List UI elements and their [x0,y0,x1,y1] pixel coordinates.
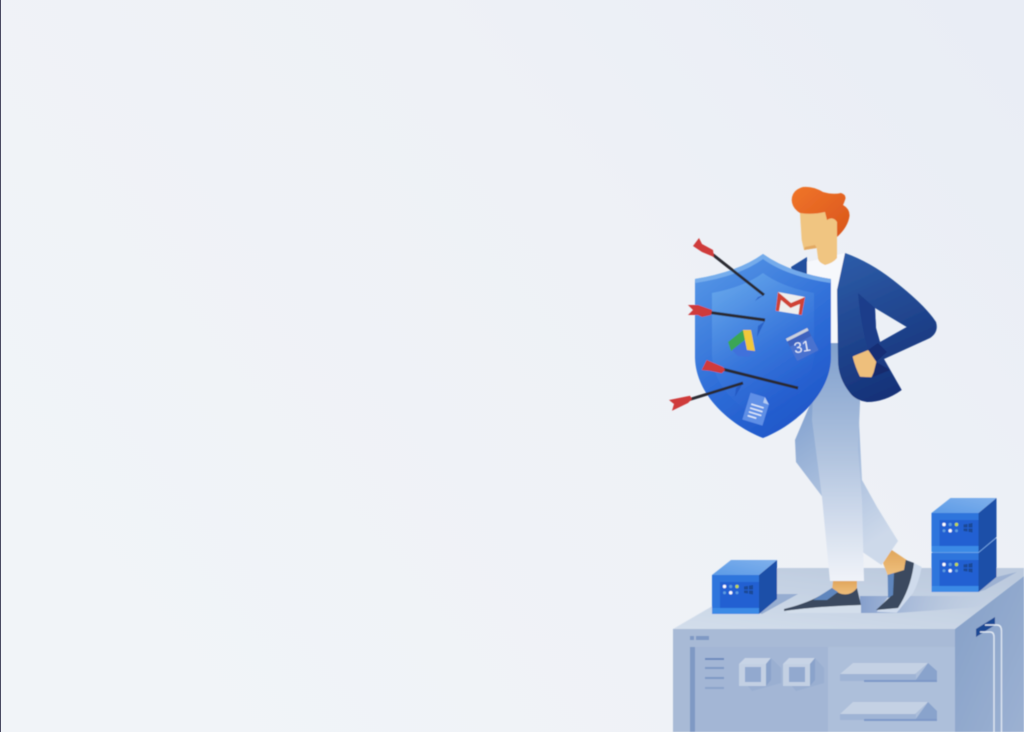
icon: gmail [776,292,805,315]
person [784,187,937,613]
icon: document [742,393,771,426]
front shoe [784,588,861,613]
arrow impact shadows [735,295,765,397]
server box: single, left [712,560,777,614]
white shirt [800,253,845,343]
platform front face [673,629,955,732]
platform menu lines [705,658,724,689]
back leg [795,400,898,565]
back ankle [883,550,907,576]
platform shadows [759,572,1017,614]
icon: drive [728,330,755,357]
platform indicator lights [690,636,709,640]
server box: stack lower [932,538,996,592]
server box: stack upper [932,498,996,552]
front ankle [832,581,857,596]
platform: server block [673,568,1024,732]
arrow: fourth [669,383,743,411]
shield inner [712,273,814,420]
icon: calendar [786,328,819,361]
platform square sockets [739,658,824,691]
arrow: third [702,360,798,388]
hair [792,187,850,237]
platform top face [673,568,1024,629]
platform drive slots [840,663,937,721]
arrow: second [688,305,765,320]
neck and face [800,212,837,265]
shield outer [695,254,831,438]
front leg [812,343,864,581]
platform cable port and cables [976,617,1002,732]
platform right face [955,576,1024,732]
back shoe [876,560,922,613]
shield [669,238,831,438]
hand [854,351,876,376]
jacket [791,253,937,402]
arrow: top [693,238,764,295]
calendar date: 31 [793,338,812,357]
